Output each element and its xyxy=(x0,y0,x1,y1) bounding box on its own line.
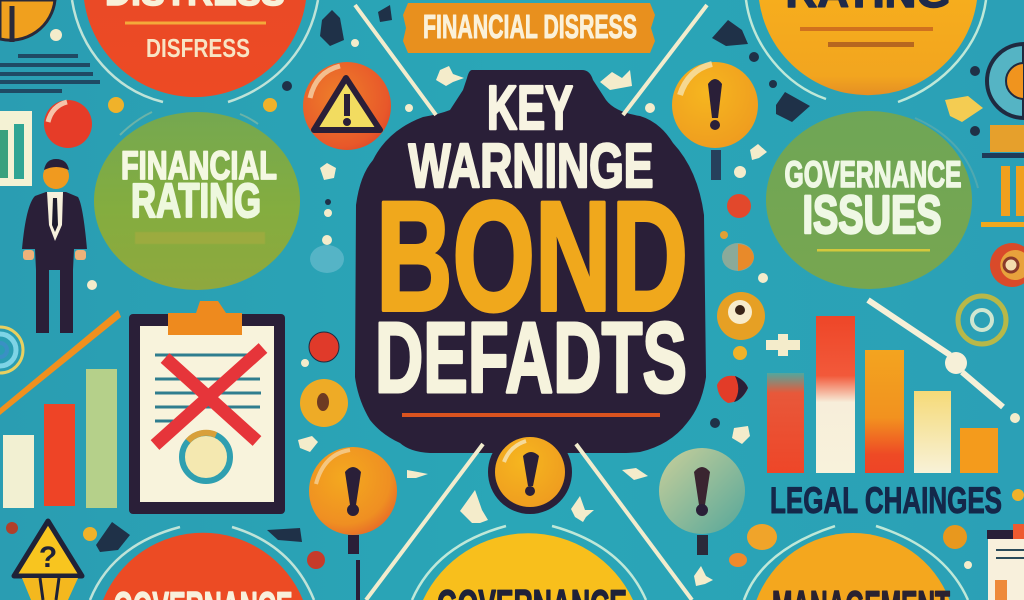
icon: green exclamation ball xyxy=(659,448,745,555)
arrow: declining trend xyxy=(868,300,1003,407)
icon: businessman xyxy=(22,159,87,333)
title: defadts: DEFADTS xyxy=(375,302,687,414)
bar chart: right xyxy=(767,316,998,473)
heading: financial rating: RATING xyxy=(131,175,261,228)
title: bond: BOND xyxy=(376,170,688,344)
heading: governance issues: ISSUES xyxy=(802,185,942,245)
panel: central title plaque xyxy=(355,70,706,514)
banner: financial distress: FINANCIAL DISRESS xyxy=(423,8,637,45)
heading: financial rating xyxy=(121,144,277,228)
icon: document bottom right xyxy=(987,524,1024,600)
icon: top left gauge xyxy=(0,0,55,42)
icon: yellow exclamation ball xyxy=(672,62,758,180)
icon: right ring gauge xyxy=(987,44,1024,118)
decorative yellow sparks xyxy=(83,96,1024,541)
banner: financial distress xyxy=(403,3,655,53)
icon: red ball xyxy=(44,100,92,148)
icon: olive ring target xyxy=(958,296,1006,344)
title: warninge: WARNINGE xyxy=(408,132,654,201)
decorative stripes xyxy=(0,56,100,91)
panel: bottom centre governance circle xyxy=(412,526,646,600)
heading: governance issues xyxy=(784,154,962,245)
panel: bottom left governance circle xyxy=(90,527,314,600)
icon: warning lamp: ? xyxy=(39,541,57,574)
icon: right target xyxy=(990,243,1024,287)
icon: spiral target left xyxy=(0,327,23,373)
icon: small chart frame xyxy=(0,111,32,186)
panel: top left distress circle xyxy=(72,0,318,102)
decorative dark splashes xyxy=(96,5,980,552)
connector lines xyxy=(355,5,707,600)
panel: bottom right management circle xyxy=(744,526,968,600)
panel: top left distress circle: DISFRESS xyxy=(146,33,250,63)
icon: centre exclamation ball xyxy=(495,437,565,507)
panel: governance issues circle xyxy=(766,111,978,289)
heading: financial rating: FINANCIAL xyxy=(121,144,277,188)
icon: warning triangle ball xyxy=(303,62,391,150)
icon: clipboard with red cross xyxy=(129,301,285,514)
icon: orange exclamation ball xyxy=(309,447,397,600)
bar chart: left xyxy=(0,310,121,508)
icon: pillars xyxy=(981,125,1024,227)
icon: warning lamp xyxy=(14,521,82,600)
panel: financial rating circle xyxy=(94,112,300,290)
title: key: KEY xyxy=(487,74,573,143)
panel: top right rating circle xyxy=(746,0,986,102)
icon: small coins and dots xyxy=(6,194,967,569)
